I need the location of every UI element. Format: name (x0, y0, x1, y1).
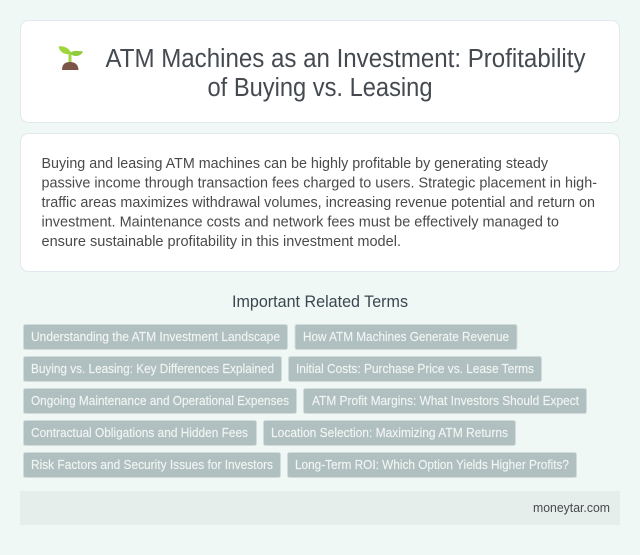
tag 4 (288, 356, 542, 382)
text block: description: Buying and leasing ATM machines can be highly profitable by generating steady (42, 155, 548, 172)
tag 3: Buying vs. Leasing: Key Differences Explained (31, 361, 274, 376)
footer (20, 491, 620, 525)
tag 3 (24, 356, 282, 382)
panel: related term tags (24, 324, 586, 478)
tag 9 (24, 452, 280, 478)
tag 6 (304, 388, 586, 414)
title (106, 45, 586, 102)
tag 10: Long-Term ROI: Which Option Yields Higher Profits? (295, 457, 569, 472)
title: of Buying vs. Leasing (208, 74, 432, 102)
tag 8: Location Selection: Maximizing ATM Returns (271, 425, 508, 440)
tag 5 (24, 388, 296, 414)
tag 1 (24, 324, 288, 350)
text block: description (42, 155, 597, 250)
tag 1: Understanding the ATM Investment Landscape (31, 329, 280, 344)
tag 7 (24, 420, 256, 446)
tag 6: ATM Profit Margins: What Investors Should Expect (312, 393, 579, 408)
icon: seedling (58, 46, 83, 70)
tag 7: Contractual Obligations and Hidden Fees (31, 425, 248, 440)
heading: important related terms: Important Related Terms (232, 293, 408, 311)
tag 2 (295, 324, 517, 350)
tag 8 (264, 420, 516, 446)
panel: title card (20, 20, 620, 122)
tag 5: Ongoing Maintenance and Operational Expenses (31, 393, 289, 408)
tag 2: How ATM Machines Generate Revenue (303, 329, 509, 344)
panel: description card (20, 134, 620, 272)
text block: description: investment. Maintenance costs and network fees must be effectively managed to (42, 214, 559, 230)
footer source text: moneytar.com (533, 500, 610, 515)
tag 10 (288, 452, 576, 478)
text block: description: traffic areas maximizes withdrawal volumes, increasing revenue potential and return on (42, 194, 595, 211)
text block: description: ensure sustainable profitability in this investment model. (42, 233, 401, 250)
tag 4: Initial Costs: Purchase Price vs. Lease Terms (296, 361, 534, 376)
title: ATM Machines as an Investment: Profitability (106, 45, 586, 73)
text block: description: passive income through transaction fees charged to users. Strategic placement in high- (42, 174, 597, 192)
tag 9: Risk Factors and Security Issues for Investors (31, 457, 273, 472)
